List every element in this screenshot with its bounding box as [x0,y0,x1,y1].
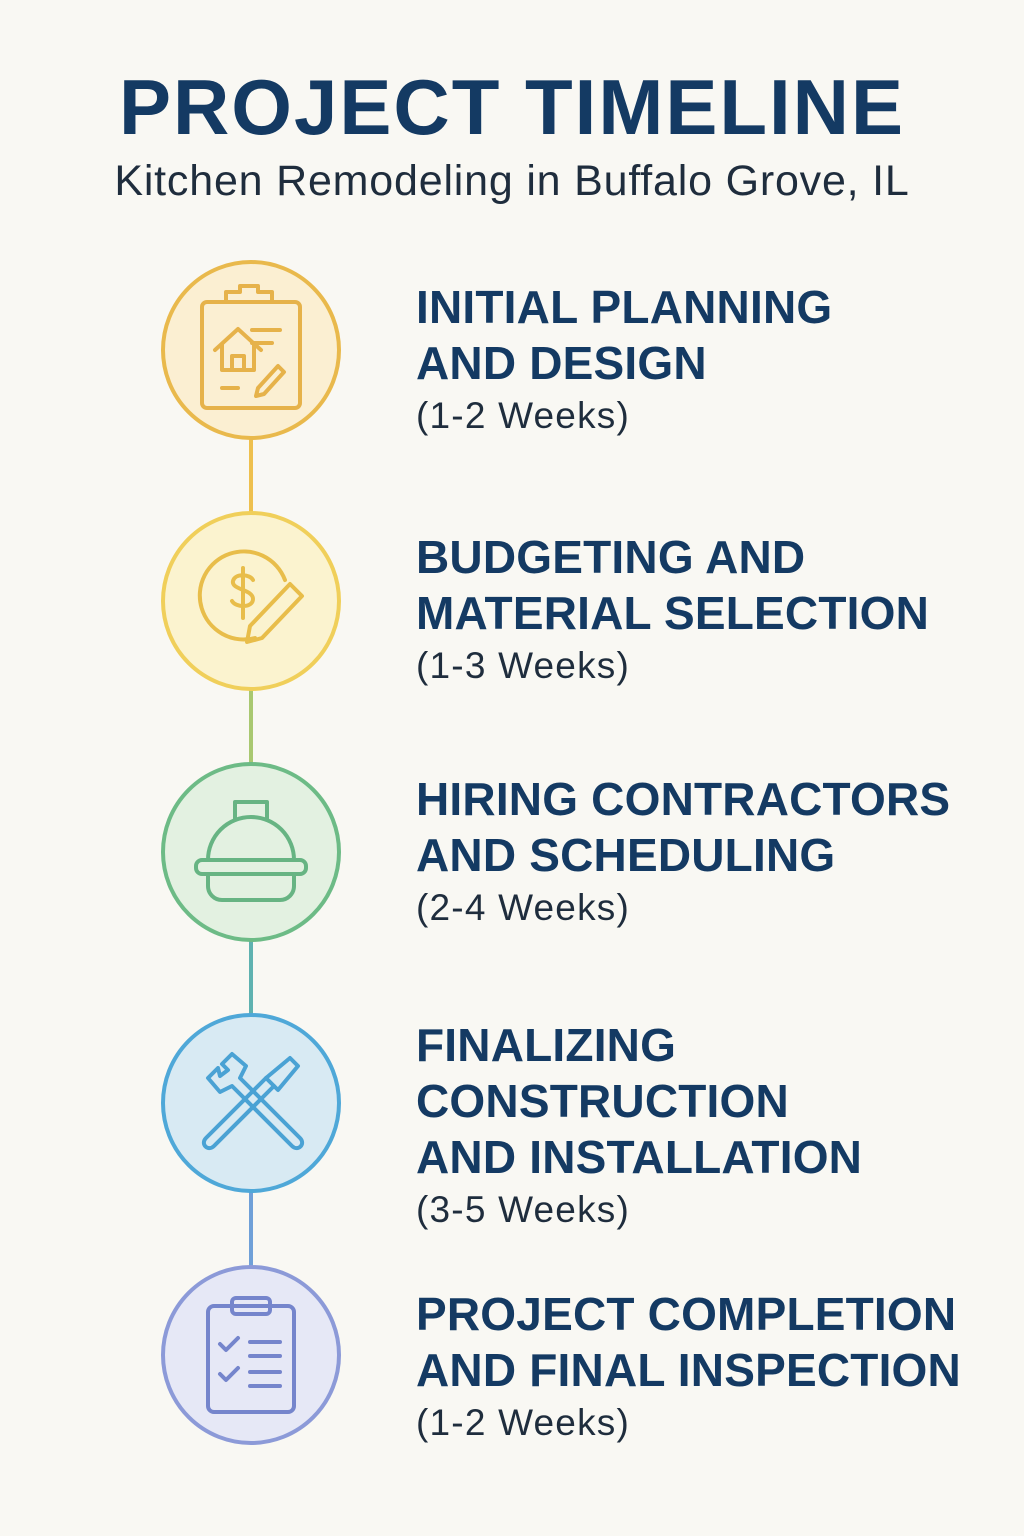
icon: hard hat [163,764,339,940]
step 3 text: AND SCHEDULING [416,829,835,881]
step 4 text [416,1019,862,1230]
icon: checklist [163,1267,339,1443]
step 5 text: AND FINAL INSPECTION [416,1344,961,1396]
step 4 text: (3-5 Weeks) [416,1189,630,1230]
connector lines [249,438,253,1267]
step 2 text [416,531,929,686]
step 1 text: AND DESIGN [416,337,707,389]
step 2 text: BUDGETING AND [416,531,805,583]
step 2 text: MATERIAL SELECTION [416,587,929,639]
icon: clipboard house [163,262,339,438]
step 3 text: (2-4 Weeks) [416,887,630,928]
step 1 text [416,281,832,436]
step 4 text: FINALIZING [416,1019,676,1071]
step 2 text: (1-3 Weeks) [416,645,630,686]
subtitle: Kitchen Remodeling in Buffalo Grove, IL [114,157,910,205]
icon: dollar pencil [163,513,339,689]
step 3 text: HIRING CONTRACTORS [416,773,950,825]
step 5 text: PROJECT COMPLETION [416,1288,956,1340]
step 5 text: (1-2 Weeks) [416,1402,630,1443]
step 1 text: INITIAL PLANNING [416,281,832,333]
step 5 text [416,1288,961,1443]
step 4 text: AND INSTALLATION [416,1131,862,1183]
title: PROJECT TIMELINE [119,63,905,151]
step 1 text: (1-2 Weeks) [416,395,630,436]
step 3 text [416,773,950,928]
step 4 text: CONSTRUCTION [416,1075,789,1127]
icon: tools [163,1015,339,1191]
